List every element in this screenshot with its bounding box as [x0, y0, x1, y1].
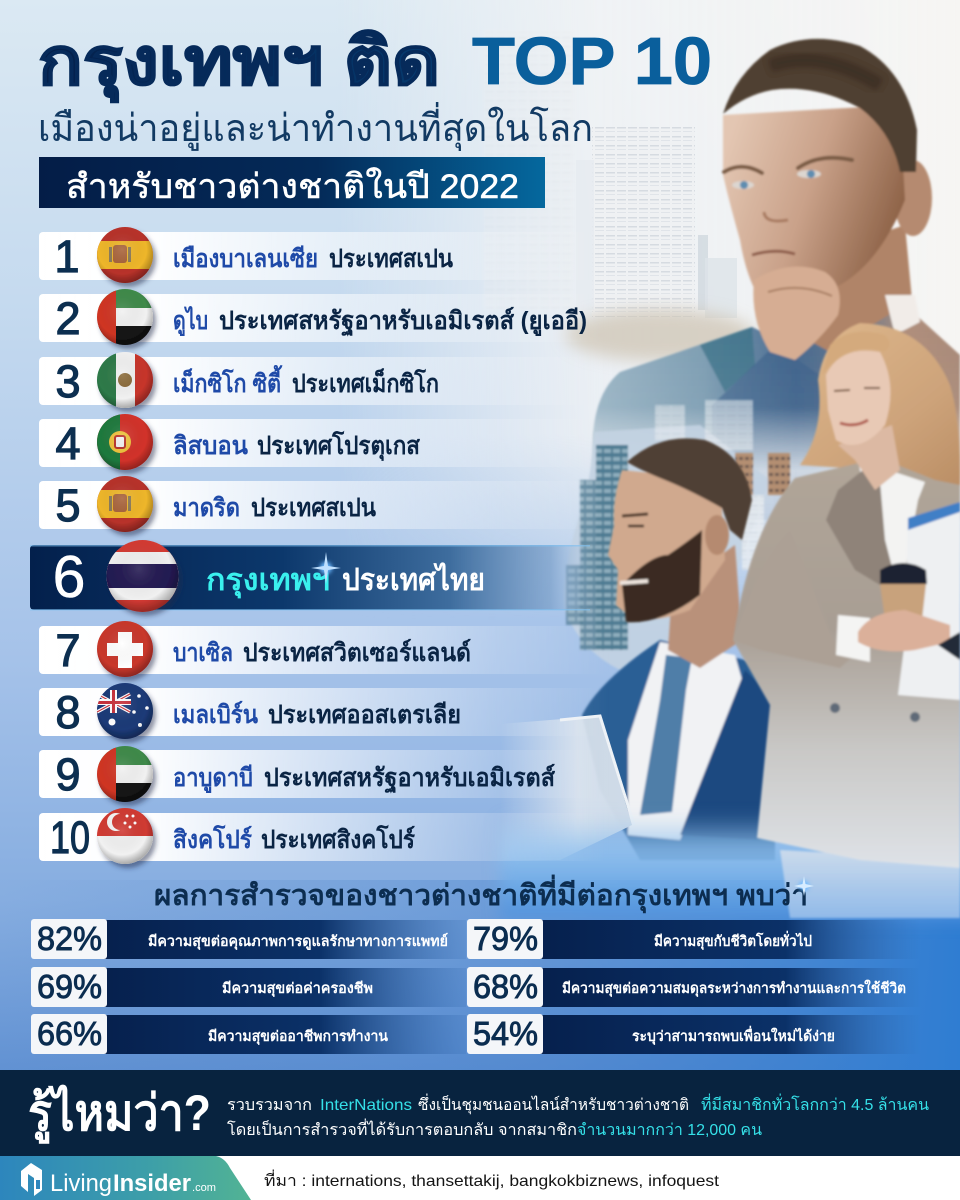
photo: laptop	[500, 716, 634, 860]
row 5: มาดริด	[173, 494, 240, 522]
neck	[668, 545, 742, 668]
sparkle	[311, 552, 341, 584]
row 6 highlighted: Bangkok	[30, 540, 590, 612]
row 7: ประเทศสวิตเซอร์แลนด์	[243, 638, 471, 667]
banner heading	[39, 157, 545, 208]
row 8: 8	[55, 687, 81, 738]
row 2: 2	[55, 293, 81, 344]
did-you-know line 1: ซึ่งเป็นชุมชนออนไลน์สำหรับชาวต่างชาติ	[418, 1093, 689, 1115]
sleeve	[733, 530, 860, 668]
row 6 highlighted: Bangkok: 6	[53, 544, 85, 610]
did-you-know line 1: ที่มีสมาชิกทั่วโลกกว่า 4.5 ล้านคน	[701, 1093, 929, 1114]
row 6 highlighted: Bangkok: กรุงเทพฯ	[206, 564, 330, 599]
title	[38, 24, 712, 103]
jacket	[733, 458, 960, 868]
row 8: เมลเบิร์น	[173, 700, 258, 729]
face	[608, 470, 725, 619]
flag: Spain	[97, 227, 153, 283]
source: ที่มา : internations, thansettakij, bangkokbiznews, infoquest	[264, 1169, 720, 1190]
did-you-know line 1	[227, 1093, 929, 1115]
shirt	[628, 642, 745, 840]
nose and mouth	[764, 212, 788, 221]
row 2: ดูไบ	[173, 305, 208, 337]
back hair	[800, 323, 960, 490]
did-you-know line 1: รวบรวมจาก	[227, 1097, 312, 1114]
stat: 68%: 68%	[473, 968, 538, 1005]
face	[826, 351, 890, 445]
stat: 54%: ระบุว่าสามารถพบเพื่อนใหม่ได้ง่าย	[632, 1025, 835, 1045]
row 2: ประเทศสหรัฐอาหรับเอมิเรตส์ (ยูเออี)	[219, 306, 587, 337]
photo: woman	[733, 323, 960, 918]
row 1	[39, 227, 472, 290]
row 7: 7	[55, 625, 81, 676]
flag: Spain	[97, 476, 153, 532]
ear	[894, 160, 932, 236]
logo text: Insider	[113, 1170, 191, 1197]
row 4: 4	[55, 418, 81, 469]
flag: Mexico	[97, 352, 154, 408]
row 7	[39, 621, 610, 677]
footer	[0, 1156, 960, 1200]
logo text: .com	[192, 1182, 216, 1194]
row 9	[39, 746, 610, 802]
hair	[723, 39, 917, 172]
row 3	[39, 352, 482, 415]
flag: UAE	[97, 746, 153, 802]
did-you-know line 2: จำนวนมากกว่า 12,000 คน	[577, 1122, 762, 1139]
row 1: 1	[54, 231, 80, 282]
flag: Thailand	[106, 540, 179, 612]
book	[898, 505, 960, 700]
stat: 82%: 82%	[37, 920, 102, 957]
flag: Switzerland	[97, 621, 153, 677]
jacket	[582, 640, 775, 860]
lapel shadow	[680, 670, 775, 840]
flag: Singapore	[97, 808, 153, 864]
beard	[622, 530, 702, 622]
row 3: 3	[55, 356, 81, 407]
background skyline	[484, 30, 755, 361]
row 5: 5	[55, 480, 81, 531]
row 6 highlighted: Bangkok: ประเทศไทย	[342, 562, 485, 597]
row 1: เมืองบาเลนเซีย	[173, 245, 318, 273]
face	[723, 105, 905, 296]
subtitle: เมืองน่าอยู่และน่าทำงานที่สุดในโลก	[38, 102, 593, 151]
title: กรุงเทพฯ ติด	[38, 24, 440, 103]
lapel	[826, 458, 905, 600]
stat: 54%: 54%	[473, 1015, 538, 1052]
row 5	[39, 476, 610, 532]
logo icon	[21, 1163, 42, 1196]
row 9: อาบูดาบี	[173, 764, 253, 794]
logo text: Living	[50, 1170, 112, 1197]
row 4: ลิสบอน	[173, 432, 248, 460]
row 3: เม็กซิโก ซิตี้	[173, 364, 283, 398]
survey heading: ผลการสำรวจของชาวต่างชาติที่มีต่อกรุงเทพฯ พบว่า	[154, 874, 808, 913]
row 4	[39, 414, 493, 477]
stat: 69%: 69%	[37, 968, 102, 1005]
row 8: ประเทศออสเตรเลีย	[268, 701, 461, 729]
stat: 69%	[31, 967, 466, 1007]
row 10: สิงคโปร์	[173, 824, 253, 854]
eyes and brows	[724, 158, 852, 173]
flag: Australia	[97, 683, 153, 739]
tie	[640, 655, 692, 815]
neck	[770, 225, 912, 352]
flag: Portugal	[97, 414, 153, 470]
stat: 82%	[31, 919, 466, 959]
row 3: ประเทศเม็กซิโก	[292, 368, 439, 398]
row 8	[39, 683, 610, 739]
trousers	[780, 850, 960, 918]
stat: 66%: 66%	[37, 1015, 102, 1052]
row 10: 10	[50, 812, 90, 863]
stat: 68%	[467, 967, 920, 1007]
did-you-know line 1: InterNations	[320, 1097, 412, 1114]
row 4: ประเทศโปรตุเกส	[257, 430, 421, 462]
hands	[858, 610, 950, 651]
row 1: ประเทศสเปน	[329, 245, 453, 273]
title: TOP 10	[472, 24, 712, 99]
hand on chin	[753, 267, 840, 360]
stat: 66%	[31, 1014, 466, 1054]
stat: 79%	[467, 919, 920, 959]
row 5: ประเทศสเปน	[251, 494, 376, 522]
stat: 82%: มีความสุขต่อคุณภาพการดูแลรักษาทางการแพทย์	[148, 932, 448, 950]
stat: 69%: มีความสุขต่อค่าครองชีพ	[222, 980, 373, 997]
stat: 54%	[467, 1014, 920, 1054]
stat: 79%: มีความสุขกับชีวิตโดยทั่วไป	[654, 930, 812, 950]
stat: 79%: 79%	[473, 920, 538, 957]
photo: thinking man	[590, 39, 960, 520]
hair	[627, 438, 752, 540]
row 7: บาเซิล	[173, 639, 233, 667]
suit with city double exposure	[590, 305, 960, 520]
did-you-know band	[0, 1070, 960, 1156]
row 9: 9	[55, 749, 81, 800]
row 10	[39, 808, 610, 864]
logo text	[50, 1170, 216, 1197]
did-you-know line 2	[227, 1118, 762, 1139]
row 10: ประเทศสิงคโปร์	[261, 824, 416, 854]
photo: bearded man	[582, 438, 775, 860]
shirt	[858, 460, 925, 575]
fringe	[822, 332, 890, 375]
banner heading: สำหรับชาวต่างชาติในปี 2022	[66, 167, 519, 206]
photo: city silhouette behind bearded man	[564, 400, 790, 670]
neck	[838, 425, 900, 490]
stat: 66%: มีความสุขต่ออาชีพการทำงาน	[208, 1028, 388, 1045]
did-you-know line 2: โดยเป็นการสำรวจที่ได้รับการตอบกลับ จากสมาชิก	[227, 1118, 577, 1139]
ear	[705, 515, 729, 555]
row 2	[39, 289, 610, 345]
flag: UAE	[97, 289, 153, 345]
stat: 68%: มีความสุขต่อความสมดุลระหว่างการทำงานและการใช้ชีวิต	[562, 979, 906, 997]
did-you-know heading: รู้ไหมว่า?	[28, 1084, 211, 1144]
eye	[622, 514, 648, 516]
jacket buttons	[830, 703, 840, 713]
row 9: ประเทศสหรัฐอาหรับเอมิเรตส์	[264, 763, 556, 794]
bottom photo fade	[500, 815, 960, 920]
coffee cup	[880, 566, 926, 620]
